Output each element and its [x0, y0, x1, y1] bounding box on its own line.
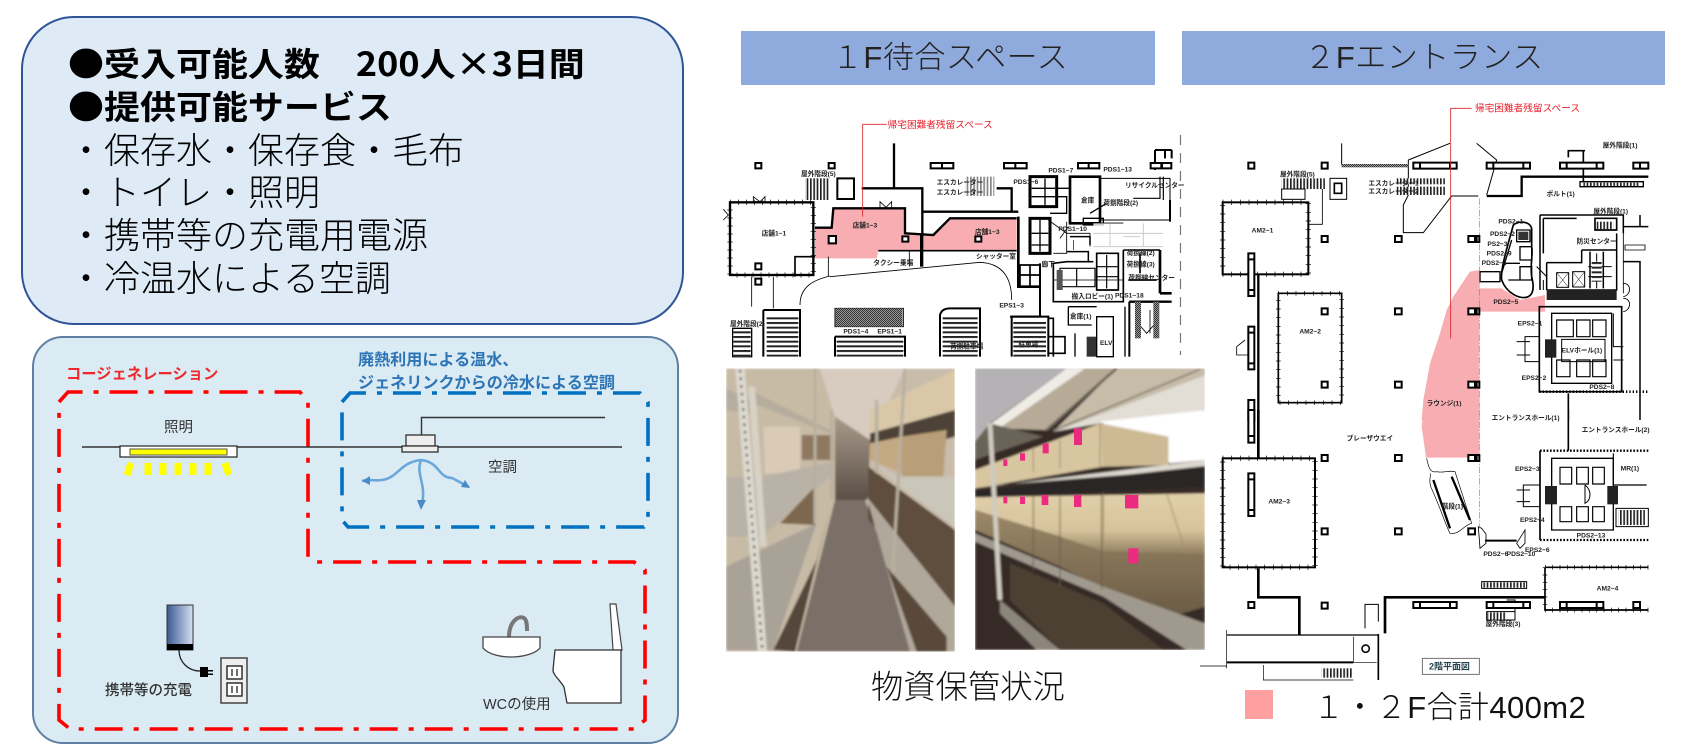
header: 2F entrance [1182, 31, 1665, 85]
heading: accepted people: ●受入可能人数 200人×3日間 [68, 38, 585, 85]
floor plan: 2F upper [1223, 102, 1648, 420]
room labels 2F upper: 屋外階段(1) [1593, 207, 1628, 216]
room labels 1F: 店舗1−3 [975, 227, 1000, 236]
icon: phone charger [167, 605, 247, 703]
walls 2F upper [1223, 143, 1648, 420]
list item: water food blanket: ・保存水・保存食・毛布 [68, 122, 464, 174]
room labels 2F lower: EPS2−4 [1520, 517, 1545, 524]
room labels 2F upper: PDS2−1 [1498, 218, 1524, 225]
list item: air conditioning: ・冷温水による空調 [68, 250, 391, 302]
room labels 2F lower: AM2−4 [1597, 586, 1619, 593]
room labels 1F: 荷捌階段(2) [1103, 198, 1138, 207]
room labels 1F: 荷捌線センター [1128, 273, 1175, 282]
floor plan: 2F lower [1200, 407, 1650, 680]
room labels 2F upper: ELVホール(1) [1562, 346, 1602, 354]
columns 2F lower [1248, 410, 1640, 609]
room labels 2F upper: エスカレーター2 [1368, 186, 1419, 195]
caption: storage status: 物資保管状況 [871, 669, 1065, 705]
diagram background [33, 337, 678, 743]
list item: toilet lighting: ・トイレ・照明 [68, 164, 320, 216]
heading: available services: ●提供可能サービス [68, 81, 392, 129]
label: WC use: WCの使用 [483, 696, 551, 713]
room labels 2F lower: PDS2−13 [1577, 532, 1606, 539]
panel background [22, 17, 683, 324]
panel: cogeneration diagram [33, 337, 678, 743]
highlighted area 1F [815, 208, 1017, 258]
callout: stranded commuter space 2F [1451, 102, 1580, 338]
callout: stranded commuter space 1F [863, 119, 993, 217]
room labels 2F upper: PDS2−8 [1589, 384, 1615, 391]
room labels 1F: 荷捌線(3) [1127, 260, 1155, 269]
dark blocks and stripes 2F lower [1322, 486, 1645, 678]
header: 1F waiting space: １F待合スペース [832, 40, 1068, 75]
list item: charging: ・携帯等の充電用電源 [68, 207, 428, 259]
air conditioning label: ジェネリンクからの冷水による空調 [358, 373, 615, 392]
room labels 1F: タクシー乗場 [873, 258, 914, 267]
room labels 2F lower: EPS2−6 [1525, 547, 1550, 554]
room labels 2F lower: EPS2−3 [1515, 466, 1540, 473]
label: 2F plan title [1422, 658, 1479, 674]
room labels 2F lower: 屋外階段(3) [1486, 619, 1520, 628]
room labels 1F: 店舗1−1 [762, 229, 787, 238]
legend text: １・２F合計400m2 [1313, 690, 1586, 725]
room labels 2F lower: 階段(1) [1442, 501, 1463, 510]
room labels 1F: PDS1−18 [1115, 292, 1144, 299]
walls 2F lower [1200, 410, 1648, 680]
room labels 2F upper: PDS2−4 [1482, 260, 1507, 267]
room labels 1F: PDS1−6 [1013, 179, 1039, 186]
photo: empty storage shelves [726, 368, 955, 652]
room labels 2F upper [1252, 141, 1637, 408]
columns 2F upper [1248, 163, 1648, 420]
photo: stocked boxes on shelves [975, 368, 1205, 650]
room labels 1F: 倉庫(1) [1070, 311, 1091, 320]
room labels 2F lower [1268, 414, 1650, 628]
room labels 1F: エスカレーター [937, 187, 984, 196]
faded rooms 1F [1093, 223, 1163, 247]
legend swatch [1245, 690, 1273, 719]
label: 2F plan title: 2階平面図 [1429, 662, 1470, 672]
icon: light fixture [120, 446, 237, 475]
cogeneration label: コージェネレーション [66, 366, 218, 383]
room labels 2F upper: EPS2−1 [1518, 321, 1543, 328]
label: charging: 携帯等の充電 [105, 681, 192, 699]
room labels 1F: 倉庫 [1081, 196, 1095, 205]
room labels 1F: シャッター室 [976, 251, 1016, 260]
icon: air conditioner [362, 418, 605, 510]
label: lighting: 照明 [164, 420, 193, 436]
room labels 1F: 荷捌線(2) [1127, 248, 1155, 257]
room labels 2F upper: エスカレーター1 [1368, 179, 1419, 188]
room labels 2F upper: 屋外階段(5) [1280, 170, 1315, 179]
icon: sink [483, 617, 540, 657]
room labels 2F upper: PS2−3 [1487, 241, 1508, 248]
room labels 2F lower: エントランスホール(1) [1492, 414, 1560, 422]
label: air conditioning: 空調 [488, 459, 517, 476]
room labels 1F: PDS1−10 [1058, 226, 1087, 233]
room labels 1F: エスカレーター [937, 177, 984, 186]
air conditioning label: 廃熱利用による温水、 [358, 351, 518, 369]
room labels 1F: 搬入ロビー(1) [1072, 291, 1113, 300]
room labels 2F upper: 屋外階段(1) [1603, 141, 1637, 150]
hatched and striped blocks 1F [733, 177, 1163, 357]
room labels 2F lower: PDS2−10 [1507, 551, 1536, 558]
room labels 2F upper: PDS2−5 [1493, 299, 1519, 306]
room labels 2F upper: ポルト(1) [1547, 190, 1575, 198]
room labels 1F: PDS1−4 [843, 328, 869, 335]
room labels 2F upper: EPS2−2 [1522, 375, 1547, 382]
legend: 1F and 2F total area [1245, 690, 1586, 725]
room labels 1F: PDS1−7 [1048, 168, 1074, 175]
room labels 1F: EPS1−1 [877, 328, 902, 335]
room labels 2F lower: AM2−3 [1268, 498, 1290, 505]
center dash-dot line 2F lower [1478, 410, 1480, 528]
icon: toilet [553, 604, 622, 703]
room labels 1F: ELV [1100, 340, 1113, 347]
air conditioning boundary [342, 393, 648, 527]
walls 1F [723, 143, 1172, 357]
air conditioning label [358, 351, 615, 392]
cogeneration boundary [59, 392, 645, 729]
room labels 1F: 屋外階段(5) [801, 169, 836, 178]
callout: stranded commuter space 1F: 帰宅困難者残留スペース [888, 119, 993, 131]
room labels 2F upper: AM2−2 [1299, 328, 1321, 335]
dashed border of 1F plan [1180, 135, 1182, 355]
room labels 2F upper: PDS2−9 [1487, 251, 1512, 258]
pink tags [1003, 428, 1138, 563]
room labels 2F upper: 防災センター [1577, 236, 1617, 245]
ceiling line [82, 446, 622, 448]
center dash-dot line 2F upper [1478, 198, 1480, 420]
room labels 1F: リサイクルセンター [1125, 180, 1185, 189]
panel: capacity and services [22, 17, 683, 324]
dark band and stripes 2F upper [1282, 164, 1640, 358]
room labels 1F: EPS1−3 [999, 302, 1024, 309]
room labels 2F upper: PDS2−2 [1490, 231, 1515, 238]
highlighted area 2F upper [1422, 270, 1545, 420]
room labels 1F: 駐車場 [1018, 340, 1039, 349]
room labels 2F lower: MR(1) [1621, 466, 1639, 473]
room labels 1F: 荷捌駐車場 [950, 341, 984, 350]
header: 1F waiting space [741, 31, 1155, 85]
columns 1F [755, 163, 1171, 285]
room labels 1F: 屋外階段(2) [730, 319, 765, 328]
room labels 1F: 廊下 [1042, 260, 1055, 269]
room labels 1F: 店舗1−3 [853, 221, 878, 230]
room labels 2F lower: PDS2−6 [1483, 551, 1509, 558]
room labels 2F lower: エントランスホール(2) [1582, 426, 1650, 434]
highlighted area 2F lower [1422, 407, 1479, 458]
room labels 1F: PDS1−13 [1103, 167, 1132, 174]
room labels 2F lower: プレーザウエイ [1347, 434, 1393, 443]
room labels 2F upper: AM2−1 [1252, 227, 1274, 234]
callout: stranded commuter space 2F: 帰宅困難者残留スペース [1475, 102, 1580, 114]
room labels 2F upper: ラウンジ(1) [1427, 399, 1461, 408]
room labels 1F [730, 167, 1185, 350]
header: 2F entrance: ２Fエントランス [1304, 40, 1544, 75]
floor plan: 1F [723, 119, 1185, 357]
